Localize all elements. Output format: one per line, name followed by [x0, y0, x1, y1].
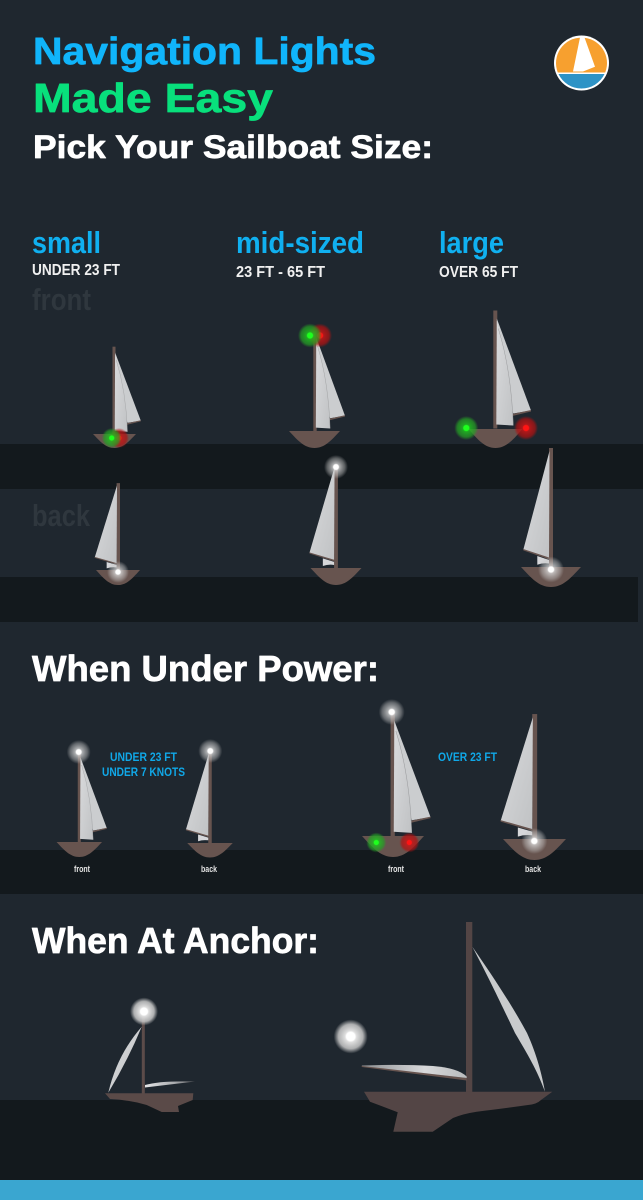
size label: small: UNDER 23 FT: [32, 262, 120, 279]
footer bar: [0, 1180, 643, 1200]
boat: large at anchor: [334, 922, 552, 1132]
boat: large back: [521, 448, 581, 587]
callout: under 23 ft under 7 knots: UNDER 23 FT: [110, 750, 178, 764]
callout: under 23 ft under 7 knots: UNDER 7 KNOTS: [102, 765, 185, 779]
callout: over 23 ft: OVER 23 FT: [438, 750, 498, 764]
boat: power large front: [362, 699, 431, 857]
title: [33, 31, 376, 121]
boat: power large back: [501, 714, 566, 860]
row label: back: back: [32, 498, 91, 533]
size label: large: [439, 225, 518, 281]
size label: small: [32, 225, 120, 279]
boat: mid-sized front: [289, 324, 345, 448]
size label: mid-sized: 23 FT - 65 FT: [236, 264, 325, 281]
icon: sailboat logo: [554, 36, 609, 90]
boat: small back: [95, 483, 140, 585]
label: power small back: back: [201, 864, 218, 874]
boat: small at anchor: [105, 998, 195, 1112]
size label: large: OVER 65 FT: [439, 264, 518, 281]
label: power large back: back: [525, 864, 542, 874]
boat: small front: [93, 347, 141, 448]
water band: under power: [0, 850, 643, 894]
heading: pick your sailboat size: Pick Your Sailboat Size:: [33, 129, 433, 165]
water band: back row: [0, 577, 638, 622]
boat: mid-sized back: [309, 455, 362, 585]
boat: large front: [454, 310, 538, 448]
heading: when under power: When Under Power:: [32, 648, 379, 689]
title: Navigation Lights: [33, 31, 376, 73]
water band: front row: [0, 444, 643, 489]
water band: at anchor: [0, 1100, 643, 1180]
boat: power small back: [186, 739, 233, 858]
boat: power small front: [57, 740, 107, 857]
row label: front: front: [32, 282, 91, 317]
label: power large front: front: [388, 864, 404, 874]
label: power small front: front: [74, 864, 90, 874]
heading: when at anchor: When At Anchor:: [32, 920, 319, 961]
callout: under 23 ft under 7 knots: [102, 750, 185, 779]
size label: mid-sized: mid-sized: [236, 225, 364, 260]
size label: large: large: [439, 225, 504, 260]
title: Made Easy: [33, 75, 273, 121]
size label: small: small: [32, 225, 101, 260]
size label: mid-sized: [236, 225, 364, 281]
